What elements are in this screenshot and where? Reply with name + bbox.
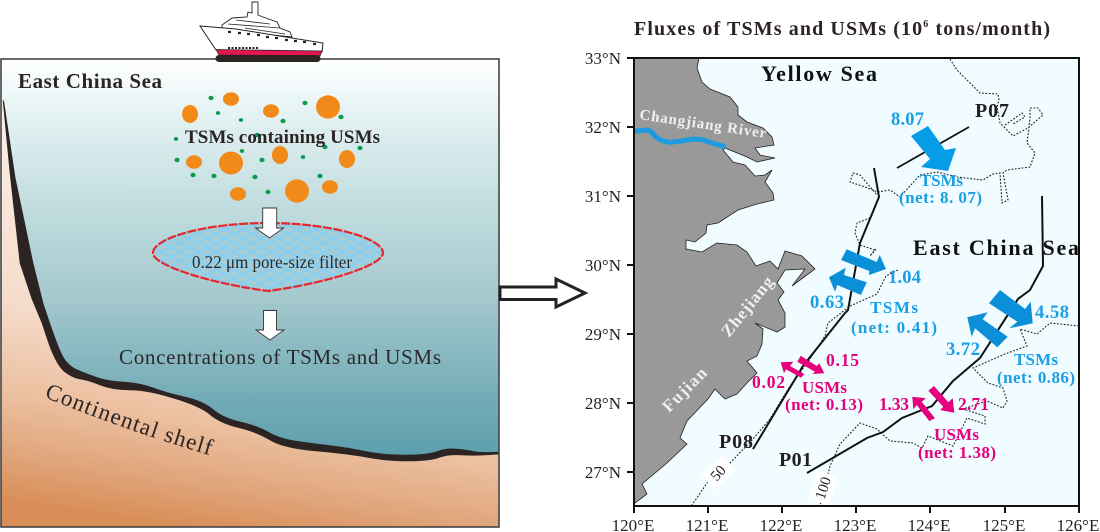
latitude labels: 32°N [585,118,621,137]
flux group: P01 TSMs [946,290,1075,387]
arrow: filter to concentrations [256,310,284,340]
label: P01: P01 [779,449,812,471]
continental shelf sediment [1,96,499,527]
panel: ocean cross-section [0,58,500,528]
latitude labels: 31°N [585,187,621,206]
label: P07: P07 [975,100,1009,122]
label: Changjiang River: Changjiang River [638,107,768,142]
longitude labels [612,516,1099,532]
label: continental shelf: Continental shelf [46,385,214,455]
flux group: P01 USMs: 1.33 [879,394,909,414]
icon: research ship [200,2,323,62]
panel border [1,59,499,527]
filter membrane [153,223,383,291]
section line P01 [807,196,1043,473]
label: TSMs containing USMs: TSMs containing USMs [185,127,380,148]
arrow: 8.07 [911,126,956,171]
latitude labels: 27°N [585,463,621,482]
label: 50 m isobath: 50 [708,463,730,485]
latitude labels: 30°N [585,256,621,275]
flux group: P01 USMs [879,386,996,462]
chart title: tons/month) [929,18,1050,40]
map frame and ticks [627,58,1079,513]
flux group: P08 TSMs: 1.04 [888,268,921,288]
arrow: 0.02 [781,362,804,378]
flux group: P08 TSMs: 0.63 [810,293,844,313]
label: 50 m isobath [701,456,735,490]
arrow: 2.71 [928,386,954,413]
label: Zhejiang: Zhejiang [717,272,778,341]
flux group: P07 TSMs: (net: 8. 07) [899,188,982,207]
label: 100 m isobath [808,470,838,506]
arrow: 3.72 [967,312,1008,347]
flux group: P07 TSMs [891,110,982,207]
arrow: link between panels [500,279,585,307]
arrow: 0.63 [829,268,867,295]
flux group: P01 USMs: USMs [934,425,979,444]
section line P07 [897,127,969,168]
Changjiang River [634,130,725,147]
flux group: P01 TSMs: 4.58 [1035,303,1069,323]
seabed dark band [3,100,499,461]
isobaths (dotted) [692,59,1079,506]
label: 100 m isobath: 100 [813,475,835,501]
flux group: P08 USMs [752,350,863,414]
particles: USMs (green) [174,96,363,194]
flux group: P07 TSMs: 8.07 [891,110,924,130]
particles: TSMs (orange) [182,92,355,203]
flux group: P01 TSMs: (net: 0.86) [997,368,1075,387]
chart title: 6 [923,19,928,30]
latitude labels: 29°N [585,325,621,344]
label: East China Sea: East China Sea [18,69,162,93]
flux group: P01 USMs: (net: 1.38) [918,443,996,462]
flux group: P08 TSMs: (net: 0.41) [851,318,937,337]
label: P08: P08 [719,431,753,453]
flux group: P08 USMs: (net: 0.13) [785,395,863,414]
label: concentrations: Concentrations of TSMs and USMs [119,345,441,369]
flux group: P08 TSMs [810,249,937,337]
arrow: 1.33 [912,397,935,421]
arrow: particles to filter [256,208,284,238]
label: East China Sea (map): East China Sea [913,235,1079,260]
panel: flux map [585,49,1099,532]
flux group: P01 TSMs: 3.72 [946,340,980,360]
flux group: P08 USMs: USMs [802,378,847,397]
latitude labels: 28°N [585,394,621,413]
flux group: P08 TSMs: TSMs [870,298,918,317]
latitude labels: 33°N [585,49,621,68]
land: Chinese coast [634,58,815,503]
chart title: Fluxes of TSMs and USMs (10 [634,18,922,40]
flux group: P08 USMs: 0.02 [752,372,785,392]
flux group: P01 USMs: 2.71 [958,394,989,414]
sea water background [1,59,499,527]
latitude labels [585,49,621,482]
arrow: 4.58 [989,290,1033,328]
flux group: P08 USMs: 0.15 [826,350,859,370]
label: Fujian: Fujian [658,363,711,416]
section line P08 [753,168,879,449]
label: filter pore size: 0.22 μm pore-size filter [192,252,352,272]
flux group: P07 TSMs: TSMs [920,171,963,190]
map sea background [634,58,1079,506]
label: Yellow Sea: Yellow Sea [761,61,877,86]
flux group: P01 TSMs: TSMs [1014,350,1058,369]
arrow: 0.15 [797,356,824,374]
arrow: 1.04 [841,249,886,275]
